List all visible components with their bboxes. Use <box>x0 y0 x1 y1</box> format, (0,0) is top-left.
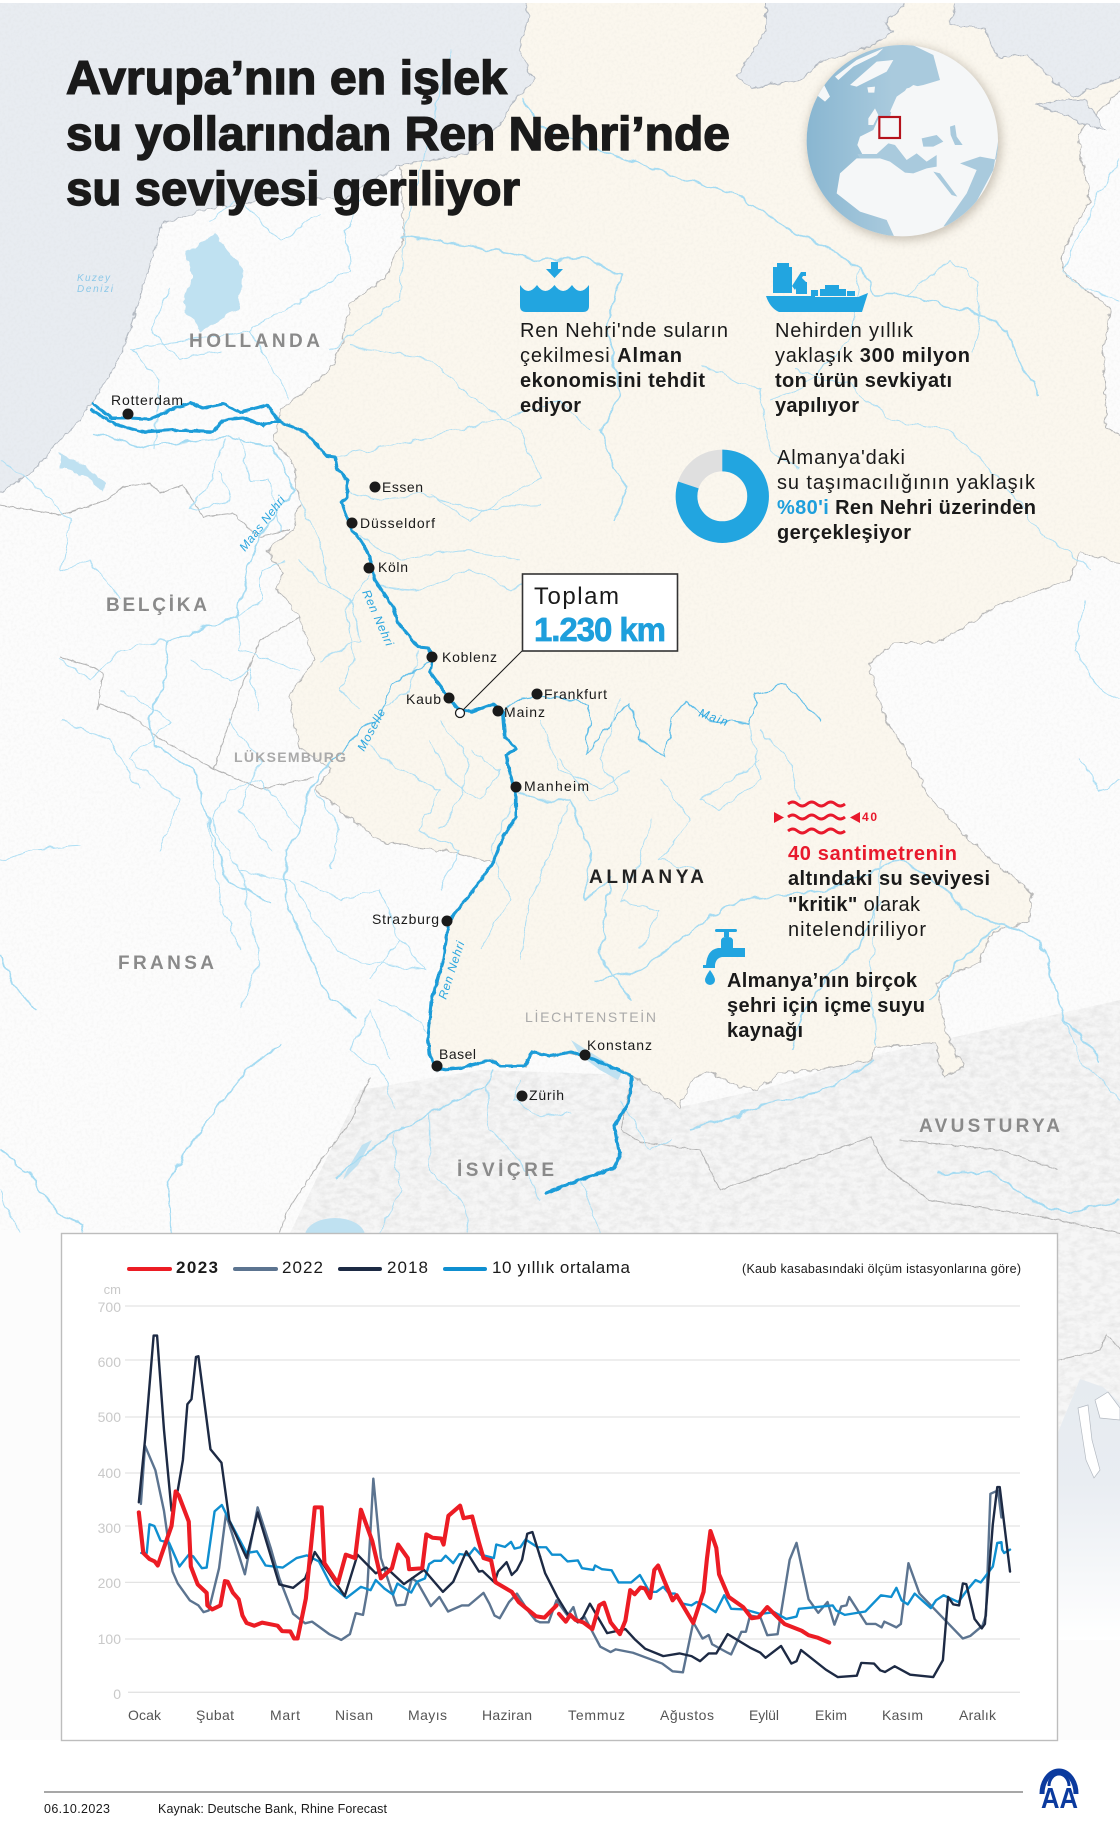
info: share of water transport <box>686 447 1036 544</box>
box <box>522 574 678 651</box>
label: Main: Main <box>697 706 730 729</box>
x axis labels: Haziran <box>482 1707 532 1723</box>
y axis labels: cm <box>104 1282 121 1297</box>
label: Avusturya: AVUSTURYA <box>919 1116 1060 1137</box>
label: Ren Nehri south: Ren Nehri <box>436 939 467 1001</box>
label: Toplam <box>534 583 619 610</box>
info: economy <box>520 262 728 417</box>
city: Basel <box>432 1046 476 1072</box>
lake: Geneva <box>305 1218 365 1254</box>
title <box>66 51 730 215</box>
y axis labels <box>98 1282 121 1702</box>
text: %80'i Ren Nehri üzerinden <box>777 497 1036 519</box>
x axis labels: Mayıs <box>408 1707 447 1723</box>
icon: waves: 40 <box>862 810 877 824</box>
legend <box>129 1258 631 1277</box>
icon: cargo ship <box>766 263 868 312</box>
text: ekonomisini tehdit <box>520 370 705 392</box>
lake: IJsselmeer <box>182 233 243 332</box>
legend: 10 yıllık ortalama <box>492 1258 631 1277</box>
marker <box>456 708 464 718</box>
source: Kaynak: Deutsche Bank, Rhine Forecast <box>158 1802 388 1816</box>
x axis labels: Aralık <box>959 1707 997 1723</box>
x axis labels: Şubat <box>196 1707 234 1723</box>
text <box>727 970 925 1042</box>
y axis labels: 700 <box>98 1299 121 1315</box>
city: Strazburg: Strazburg <box>372 911 439 927</box>
title: Avrupa’nın en işlek <box>66 51 508 104</box>
cities <box>111 392 652 1103</box>
legend: 2023 <box>176 1258 218 1277</box>
city: Koblenz: Koblenz <box>442 649 497 665</box>
city: Düsseldorf: Düsseldorf <box>360 515 435 531</box>
city: Essen: Essen <box>382 479 423 495</box>
text <box>788 843 990 941</box>
text: Almanya'daki <box>777 447 905 469</box>
date: 06.10.2023 <box>44 1802 110 1816</box>
text: "kritik" olarak <box>788 894 921 916</box>
locator globe <box>802 41 1006 245</box>
text: gerçekleşiyor <box>777 522 911 544</box>
text: yapılıyor <box>775 395 859 417</box>
y axis labels: 600 <box>98 1354 121 1370</box>
label: Belçika: BELÇİKA <box>106 595 207 616</box>
logo: AA: AA <box>1041 1783 1078 1815</box>
value: 1.230 km <box>534 611 666 648</box>
text: 40 santimetrenin <box>788 843 957 865</box>
Mediterranean <box>857 143 937 173</box>
label: Liechtenstein: LİECHTENSTEİN <box>525 1008 656 1025</box>
x axis labels: Ağustos <box>660 1707 714 1723</box>
label: Lüksemburg: LÜKSEMBURG <box>234 749 346 765</box>
label: İsviçre: İSVİÇRE <box>457 1160 554 1181</box>
text <box>777 447 1036 544</box>
country labels <box>106 331 1060 1181</box>
text: Almanya’nın birçok <box>727 970 918 992</box>
label: Fransa: FRANSA <box>118 953 214 974</box>
x axis labels: Ekim <box>815 1707 847 1723</box>
logo: AA <box>1041 1771 1078 1815</box>
top strip <box>0 0 1120 3</box>
footer rule <box>44 1791 1023 1793</box>
chart frame <box>62 1234 1058 1740</box>
text: Nehirden yıllık <box>775 320 914 342</box>
title: su yollarından Ren Nehri’nde <box>66 107 730 160</box>
text <box>520 320 728 417</box>
label: Hollanda: HOLLANDA <box>189 331 320 352</box>
city: Zürih: Zürih <box>529 1087 564 1103</box>
locator square <box>879 117 900 138</box>
globe shadow <box>807 46 1001 240</box>
label: Kuzey Denizi: Kuzey <box>77 273 111 284</box>
city: Konstanz <box>580 1037 652 1060</box>
label: Moselle: Moselle <box>354 706 388 753</box>
series: 2022 <box>141 1446 1001 1672</box>
legend: 2018 <box>387 1258 428 1277</box>
label: Denizi: Denizi <box>77 284 114 295</box>
panel: water level chart <box>62 1234 1058 1740</box>
tributary rivers <box>0 50 1120 1233</box>
sea: Baltic east <box>950 0 1120 96</box>
city: Rotterdam: Rotterdam <box>111 392 183 408</box>
text: nitelendiriliyor <box>788 919 926 941</box>
y axis labels: 500 <box>98 1409 121 1425</box>
text: ton ürün sevkiyatı <box>775 370 952 392</box>
text: şehri için içme suyu <box>727 995 925 1017</box>
x axis labels <box>128 1707 997 1723</box>
label: Ren Nehri north: Ren Nehri <box>359 588 397 648</box>
label: Almanya: ALMANYA <box>589 867 704 888</box>
leader line <box>463 651 522 710</box>
x axis labels: Ocak <box>128 1707 162 1723</box>
city: Köln <box>364 559 408 575</box>
city: Basel: Basel <box>439 1046 476 1062</box>
series: 2018 <box>139 1336 1010 1677</box>
text: çekilmesi Alman <box>520 345 682 367</box>
legend: 2022 <box>282 1258 323 1277</box>
text <box>775 320 970 417</box>
sea: Baltic west <box>737 0 905 87</box>
text: yaklaşık 300 milyon <box>775 345 970 367</box>
x axis labels: Mart <box>270 1707 300 1723</box>
y axis labels: 100 <box>98 1631 121 1647</box>
info: critical level <box>774 802 990 941</box>
icon: waves <box>774 802 877 833</box>
lake: Constance <box>571 1040 622 1080</box>
gridlines <box>125 1306 1020 1692</box>
lagoon <box>1035 100 1105 130</box>
text: altındaki su seviyesi <box>788 868 990 890</box>
borders <box>0 483 1120 1360</box>
river: Rhine <box>91 403 632 1193</box>
Croatian islands <box>1078 1392 1120 1478</box>
text: Ren Nehri'nde suların <box>520 320 728 342</box>
y axis labels: 400 <box>98 1465 121 1481</box>
icon: tap <box>703 929 745 985</box>
text: ediyor <box>520 395 581 417</box>
y axis labels: 300 <box>98 1520 121 1536</box>
x axis labels: Eylül <box>749 1707 779 1723</box>
city: Frankfurt: Frankfurt <box>544 686 607 702</box>
series: 2023 <box>139 1491 829 1643</box>
city: Konstanz: Konstanz <box>587 1037 652 1053</box>
info: drinking water <box>703 929 925 1042</box>
city: Kaub: Kaub <box>406 691 441 707</box>
lake: Neuchatel <box>343 1140 372 1180</box>
x axis labels: Temmuz <box>568 1707 625 1723</box>
text: su taşımacılığının yaklaşık <box>777 472 1036 494</box>
sea: North Sea <box>0 0 535 505</box>
data lines <box>139 1336 1010 1677</box>
text: kaynağı <box>727 1020 803 1042</box>
land: Germany <box>267 0 1120 1107</box>
y axis labels: 0 <box>113 1686 121 1702</box>
city: Köln: Köln <box>378 559 408 575</box>
title: su seviyesi geriliyor <box>66 162 520 215</box>
callout: total length <box>456 574 678 718</box>
city: Rotterdam <box>111 392 183 420</box>
mountain relief <box>280 1000 1120 1440</box>
y axis labels: 200 <box>98 1575 121 1591</box>
river: northern delta branch <box>93 403 280 422</box>
river: southern delta branch <box>91 410 280 432</box>
river labels <box>77 273 730 1001</box>
icon: water level <box>520 262 589 312</box>
sea: Adriatic <box>1058 1379 1120 1640</box>
river: main course <box>280 422 632 1193</box>
city: Manheim: Manheim <box>524 778 589 794</box>
series: 10-year average <box>141 1505 1010 1619</box>
x axis labels: Kasım <box>882 1707 923 1723</box>
donut chart <box>686 460 758 532</box>
x axis labels: Nisan <box>335 1707 373 1723</box>
footer <box>44 1771 1078 1816</box>
info: shipping <box>766 263 970 417</box>
water: Zeeland <box>60 452 105 490</box>
label: Maas: Maas Nehri <box>236 493 288 554</box>
chart note: (Kaub kasabasındaki ölçüm istasyonlarına göre) <box>742 1262 1021 1276</box>
city: Mainz: Mainz <box>504 704 545 720</box>
speckle texture <box>0 0 1120 1230</box>
